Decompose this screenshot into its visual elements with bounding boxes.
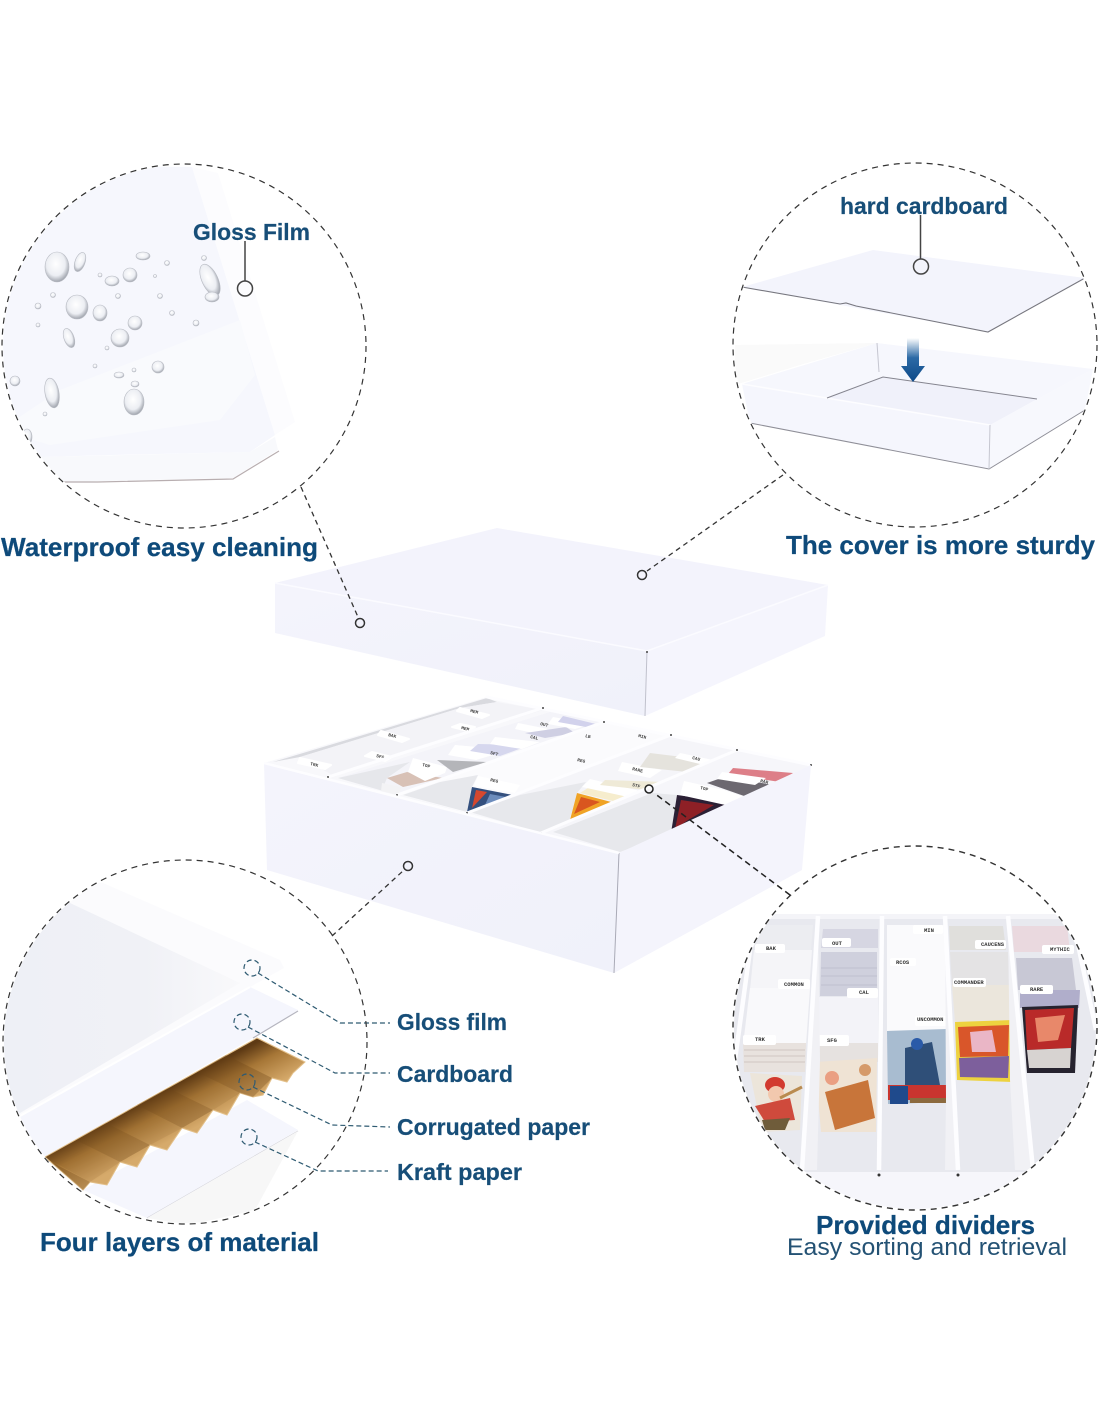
column 2 cards [815,929,878,1132]
column 5 cards: MYTHIC [1050,946,1071,953]
label: corrugated paper: Corrugated paper [397,1114,590,1140]
column 1 cards: TRK [755,1036,766,1043]
gloss film top layer [0,880,284,1120]
connector: layers circle to box [332,862,412,936]
dashed circle frame [733,163,1097,527]
label: kraft paper: Kraft paper [397,1159,522,1185]
kraft paper layer [83,1100,298,1218]
dashed circle frame [3,860,367,1224]
heading: hard cardboard: hard cardboard [840,193,1008,219]
tray [735,343,877,385]
pointer: cardboard [234,1014,390,1073]
caption: waterproof: Waterproof easy cleaning [1,532,318,562]
column 2 cards: OUT [832,940,843,947]
divider strips [735,916,1096,1170]
infographic canvas [0,162,1098,1260]
panel: hard cardboard cover detail [733,163,1097,527]
icon: downward arrow [901,338,925,382]
compartment one, tabs: TRK [310,761,319,769]
cover sheet [742,250,1085,332]
compartment four, orange card: STF [632,782,641,790]
column 5 cards [1012,926,1080,1073]
compartment five, red dark card: RAR [760,778,769,786]
column 4 cards: COMMANDER [954,979,984,986]
pointer: gloss film [244,960,390,1023]
pointer: kraft paper [241,1129,388,1171]
caption: four layers: Four layers of material [40,1227,319,1257]
compartment three, white stack and card: LB [585,733,591,740]
compartment three, white stack and card: REG [577,757,586,765]
corrugated paper layer [43,1038,305,1190]
layer pointers [234,960,390,1171]
compartment five, red dark card [541,750,811,853]
divider end rivets [327,707,812,834]
compartment two, cards: OUT [540,721,549,729]
compartment two, cards: CAL [530,734,539,742]
column 4 cards: CAUCENS [981,941,1005,948]
column 2 cards: SFG [827,1037,838,1044]
compartment two, cards: SFT [490,750,499,758]
callout pointer: Gloss Film [238,241,252,296]
column 3 cards: MIN [924,927,934,934]
compartment one, tabs: MEM [461,725,470,733]
gloss film sheet [0,165,275,457]
cardboard layer [0,987,298,1157]
column 3 cards [887,925,948,1104]
column 3 cards: RCOS [896,959,910,966]
label: gloss film: Gloss film [397,1009,507,1035]
back left wall [273,698,497,762]
dividers [328,697,811,833]
heading: Gloss Film: Gloss Film [193,219,310,245]
column 5 cards: RARE [1030,986,1044,993]
connector: dividers circle to cards [645,785,790,895]
panel: provided dividers detail [733,846,1098,1212]
panel: four layers of material [0,860,390,1225]
compartment two, cards: TOP [422,762,431,770]
label: cardboard: Cardboard [397,1061,513,1087]
compartment five, red dark card: TOP [700,785,709,793]
lid of the box [275,528,828,716]
compartment three, white stack and card: REG [490,777,499,785]
water droplets [10,251,224,445]
column 1 cards [743,944,812,1132]
open box with dividers and cards [264,697,812,973]
callout pointer: hard cardboard [914,215,928,274]
compartment three, white stack and card [403,722,671,813]
box front face [264,763,619,973]
compartment two, cards [338,712,604,795]
caption: provided dividers: Provided dividers [816,1210,1035,1240]
divider side walls [804,949,1030,1170]
box right face [614,765,811,973]
compartment four, orange card: CAU [692,755,701,763]
box interior [264,697,811,853]
column 2 cards: CAL [859,989,870,996]
dashed circle frame [733,846,1097,1210]
cardboard base [0,437,278,482]
tray floor [733,917,1098,1172]
column 4 cards [949,926,1013,1082]
column 1 cards: BAK [766,945,777,952]
dashed circle frame [2,164,366,528]
compartment one, tabs: BAK [388,732,397,740]
compartment one, tabs [298,702,543,775]
compartment three, white stack and card: MIN [638,733,647,741]
column 3 cards: UNCOMMON [917,1016,943,1023]
compartment one, tabs: MEM [470,708,479,716]
column 1 cards: COMMON [784,981,804,988]
compartment four, orange card [470,735,737,833]
connector: cover circle to lid [638,475,783,580]
caption: sturdy cover: The cover is more sturdy [786,530,1096,560]
compartment one, tabs: SFG [376,753,385,761]
caption: easy sorting: Easy sorting and retrieval [787,1234,1067,1261]
pointer: corrugated paper [239,1074,390,1127]
panel: waterproof film detail [0,164,366,528]
compartment four, orange card: RARE [632,766,644,775]
connector: film circle to lid [301,487,364,628]
